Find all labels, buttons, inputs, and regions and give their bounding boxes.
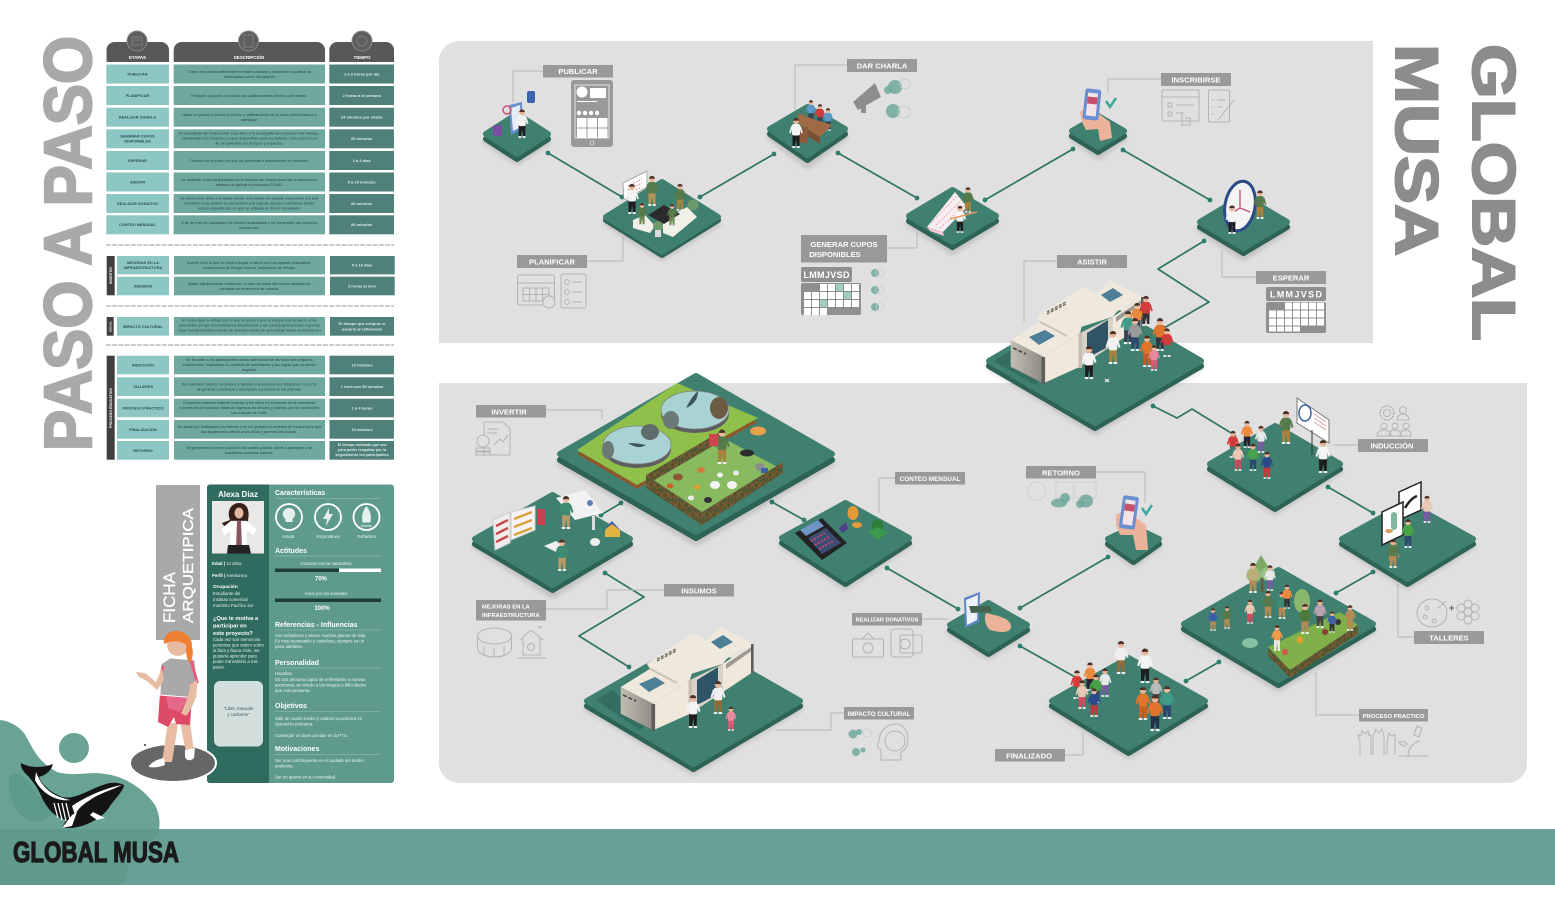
row: conteo mensual: inversiones. [239, 225, 260, 230]
row: impacto cultural: usuario al reflexionar [342, 326, 383, 332]
row: planificar: 2 horas a la semana [343, 93, 381, 98]
label: dar charla: DAR CHARLA [857, 62, 908, 70]
logo whale [21, 763, 124, 828]
row: asistir: ASISTIR [130, 180, 145, 184]
icon: cultural molecules and head [848, 724, 908, 760]
ficha motivation: Cada vez son menos las [213, 637, 260, 642]
logo blob [0, 720, 160, 885]
row: esperar: 1 a 3 días [353, 158, 371, 163]
label: asistir [1057, 255, 1127, 268]
scene: realizar donativos platform [950, 592, 1027, 657]
section sidebar: social [107, 317, 114, 336]
wall calendar with people [927, 187, 977, 236]
scene: proceso practico platform [1184, 555, 1373, 689]
row: realizar donativo: 80 minutos [351, 201, 373, 206]
row: retorno: inscribirán usuarios nuevos. [225, 450, 273, 455]
row: proceso practico: PROCESO PRACTICO [123, 406, 163, 410]
presentation board [1297, 398, 1329, 455]
row: talleres: de generar conciencia y recreación expresiva en los jóvenes. [197, 386, 302, 392]
ficha objetivos [275, 703, 381, 738]
row: impacto cultural: crear nuevas semillas a través de diversas formas de aprendizaje desde un impacto en [178, 328, 321, 332]
icon: return and teal clouds [1028, 482, 1096, 508]
row: planificar: Realizar una junta con todos los colaboradores internos del museo. [191, 93, 307, 98]
label: insumos [664, 584, 734, 596]
table header: tiempo [329, 31, 394, 62]
label: planificar [517, 255, 587, 268]
row: realizar charla: REALIZAR CHARLA [119, 114, 156, 120]
row: mejoras: 5 a 10 días [352, 262, 373, 268]
ficha personalidad [275, 660, 381, 693]
guides and children [1228, 411, 1330, 479]
label: retorno: RETORNO [1042, 468, 1080, 478]
connector: planificar to dar charla [698, 152, 776, 199]
row: finalizacion: 10 minutos [351, 427, 373, 432]
row: realizar donativo: momento a los padres se les invitará a la caja de aportes voluntarios donde [184, 200, 314, 206]
row: retorno [117, 441, 394, 460]
ficha quote box: y conforme" [227, 712, 250, 717]
ficha quote box: "Libre, tranquilo [224, 706, 254, 711]
label: retorno [1026, 466, 1096, 478]
row: talleres: Se realizarán talleres de pintura y también presentaciones didácticas con el fin [182, 382, 317, 386]
row: asistir: Se recibirán a los participantes en la entrada del museo para dar la bienvenida, [181, 177, 318, 182]
label: realizar donativos [852, 613, 922, 626]
children painting [1387, 496, 1432, 568]
ficha referencias: paso adelante. [275, 644, 303, 649]
scene: publicar platform [486, 91, 548, 162]
label: insumos: INSUMOS [681, 586, 717, 596]
row: asistir: 5 a 10 minutos [348, 180, 376, 184]
children gardening [1208, 563, 1355, 651]
table header: descripcion: DESCRIPCIÓN [234, 55, 264, 60]
label: mejoras en la infraestructura [476, 600, 546, 620]
panel: ficha arquetipica [156, 484, 394, 783]
ficha referencias: Referencias - Influencias [275, 622, 358, 629]
ficha personalidad: Hazañas [275, 671, 292, 676]
icon: investment report [476, 422, 510, 455]
row: proceso practico [117, 399, 394, 417]
row: realizar donativo [106, 194, 394, 213]
ficha caracteristicas [275, 490, 381, 539]
ficha caracteristicas: Características [275, 490, 325, 497]
ficha motivaciones [275, 746, 381, 780]
ficha referencias: Es muy reponsable y cautelosa, siempre va un [275, 638, 365, 644]
ficha title strip: ARQUETIPICA [180, 508, 197, 623]
icon: megaphone and teal thought bubbles [853, 79, 910, 118]
grass field with pools [577, 383, 758, 489]
row: proceso practico: a través de la botánica, tratando ingresos de árboles y plantas que se carbonizan [179, 405, 319, 410]
row: impacto cultural [117, 317, 394, 336]
ficha quote box [214, 681, 263, 746]
ficha personal data: Estudiante del [213, 591, 240, 596]
row: generar cupos [106, 129, 394, 148]
icon: pool and animal house [478, 626, 546, 658]
scene: retorno platform [1108, 495, 1159, 565]
ficha card background [207, 484, 394, 783]
row: publicar [106, 64, 394, 84]
ficha caracteristicas: Espontánea [317, 534, 340, 539]
label: asistir: ASISTIR [1077, 258, 1107, 266]
museum building [621, 627, 754, 731]
garden bed with fence [1268, 612, 1358, 678]
row: finalizacion: Se darán por finalizados los talleres y se les guiará a la entrada de museo para que [177, 424, 321, 429]
ficha personal data: Ocupación [213, 584, 238, 590]
row: insumos: Mayor equipamiento médico en el área de salud del museo además de [188, 281, 311, 286]
label: generar cupos disponibles [801, 235, 887, 262]
people meeting [626, 176, 685, 227]
connector: conteo to donativos [885, 566, 960, 611]
row: finalizacion: FINALIZACIÓN [129, 427, 157, 432]
ficha actitudes: 100% [314, 606, 330, 612]
connector: dar charla to generar cupos [836, 151, 919, 200]
row: generar cupos: El encargado del museo Don José Brito y la encargada del proyecto Fae Hidalgo, [179, 130, 320, 136]
label: conteo mensual: CONTEO MENSUAL [900, 476, 960, 483]
hand holding phone [1080, 88, 1116, 141]
row: retorno: para poder respaldar por la [338, 448, 387, 452]
section sidebar: proceso educativo [107, 356, 115, 460]
heading: paso a paso: PASO A PASO [31, 36, 106, 451]
panel: lower process background [439, 383, 1527, 783]
label: publicar: PUBLICAR [558, 67, 598, 76]
row: mejoras: MEJORAS EN LA [127, 260, 159, 265]
row: induccion: introducción, explicando la variedad de actividades y las reglas que se deben [183, 362, 316, 367]
painting easels [1382, 482, 1421, 560]
ficha actitudes [275, 548, 381, 612]
heading: global: GLOBAL [1460, 44, 1527, 341]
visitors crowd [1082, 296, 1173, 382]
row: mejoras: Invertir todo lo que se espera lograr a futuro con los aportes voluntarios: [187, 260, 311, 265]
ficha motivation: personas que saben sobre [213, 642, 264, 648]
ficha personal data: Edad | 14 años [212, 561, 241, 566]
ficha title strip [156, 485, 200, 640]
section sidebar: invertir: INVERTIR [109, 267, 113, 284]
row: retorno: seguridad de los participantes [335, 453, 389, 457]
animal enclosure with fence [646, 426, 783, 525]
ficha objetivos: Salir de cuarto medio y realizar su práctica en [275, 716, 363, 721]
section sidebar: invertir [107, 256, 115, 295]
row: insumos: contratar un enfermero de cabeza. [219, 286, 279, 291]
scene: inscribirse platform [1072, 88, 1124, 157]
row: induccion: Se llevarán a los participantes a una sala donde se les hará una pequeña [186, 357, 314, 362]
ficha motivation: ¿Que te motiva a [213, 616, 259, 622]
ficha actitudes: 70% [315, 576, 328, 582]
ficha objetivos: operación portuaria. [275, 722, 313, 726]
icon: palette plus flower: + [1449, 603, 1454, 613]
ficha personalidad: Personalidad [275, 660, 319, 667]
icon: registration form and checklist [1162, 90, 1234, 125]
row: asistir: además de aplicar el protocolo COVID. [216, 182, 283, 187]
scene: impacto cultural platform [587, 627, 800, 772]
calculator [795, 518, 847, 560]
row: induccion: INDUCCIÓN [132, 362, 154, 368]
label: proceso practico: PROCESO PRACTICO [1363, 714, 1425, 720]
connector: proceso practico to finalizado [1184, 660, 1221, 683]
scene: asistir platform [989, 280, 1201, 432]
ficha motivaciones: Ser una contribuyente en el cuidado del medio [275, 758, 364, 763]
section sidebar: proceso educativo: PROCESO EDUCATIVO [109, 388, 113, 428]
row: talleres: TALLERES [133, 384, 154, 389]
ficha referencias: Son soñadores y tienen muchos planes de vida. [275, 633, 366, 638]
row: realizar charla: Hacer un puerta a puerta en liceos y notificaciones de la zona para invitarlos a [182, 112, 318, 117]
icon: esperar calendar [1266, 287, 1326, 333]
label: inscribirse: INSCRIBIRSE [1172, 76, 1220, 84]
panel: upper process background [439, 41, 1373, 343]
ficha caracteristicas: Soñadora [357, 534, 376, 539]
label: generar cupos disponibles: GENERAR CUPOS [810, 240, 878, 249]
ficha personal data: Instituto comercial [213, 597, 248, 602]
icon: palette plus flower [1417, 599, 1479, 627]
connector: asistir to induccion [1151, 404, 1236, 436]
row: mejoras: INFRAESTRUCTURA [124, 265, 163, 270]
row: retorno: RETORNO [133, 448, 153, 453]
label: conteo mensual [895, 472, 965, 484]
row: planificar [106, 86, 394, 105]
row: proceso practico: 2 a 4 horas [352, 406, 373, 410]
scene: induccion platform [1210, 398, 1340, 512]
row: esperar: ESPERAR [128, 158, 147, 163]
icon: tablet with social profile [571, 80, 613, 147]
connector: induccion to talleres [1326, 485, 1375, 515]
ficha motivation: participar en [213, 624, 247, 630]
ficha personal data: Perfil | Aventurera [212, 573, 248, 578]
label: dar charla [847, 59, 917, 72]
row: proceso practico: con noticias de Chile. [231, 410, 268, 415]
ficha motivaciones: Motivaciones [275, 746, 319, 753]
row: generar cupos: GENERAR CUPOS [120, 134, 155, 138]
label: finalizado: FINALIZADO [1006, 752, 1052, 760]
row: proceso practico: El proceso práctico trata de insertar a los niños en el mundo de la naturaleza [183, 400, 316, 405]
ficha actitudes: Contacto con la naturaleza [300, 561, 352, 566]
row: generar cupos: DISPONIBLES [124, 138, 151, 144]
row: insumos: 3 horas al mes [348, 284, 377, 288]
museum guides and child [686, 681, 736, 731]
label: inscribirse [1161, 73, 1231, 86]
meeting table and sofas [633, 200, 698, 237]
table header: etapas: ETAPAS [129, 55, 146, 60]
row: retorno: El tiempo estimado que sea [338, 443, 387, 447]
big clock with people [1221, 179, 1266, 234]
label: mejoras en la infraestructura: INFRAESTRUCTURA [482, 613, 540, 619]
label: finalizado [995, 749, 1065, 762]
label: publicar [543, 65, 613, 78]
section sidebar: social: SOCIAL [108, 321, 112, 332]
connector: finalizado to donativos [1018, 644, 1075, 677]
label: proceso practico [1359, 709, 1428, 722]
ficha name: Alexa Diaz [218, 490, 258, 499]
row: realizar charla [106, 108, 394, 127]
label: impacto cultural: IMPACTO CULTURAL [848, 711, 911, 718]
connector: donativos to retorno [1018, 555, 1110, 610]
connector: publicar to planificar [546, 151, 624, 199]
connector: invertir to conteo [770, 500, 806, 522]
row: esperar: Cuenta con un plazo en que las personas e instituciones se inscriben. [189, 158, 310, 163]
scene: dar charla platform [770, 100, 845, 166]
icon: planning calendar and checklist [518, 274, 586, 308]
connector: esperar to asistir [1158, 239, 1209, 330]
ficha caracteristicas: Astuta [282, 534, 295, 539]
ficha motivaciones: Ser un aporte en su comunidad. [275, 774, 336, 780]
row: publicar: 1 a 2 horas por día [344, 72, 380, 76]
tree and bushes [1242, 555, 1310, 648]
row: generar cupos: fin de optimizar los tiempos y espacios. [215, 140, 283, 146]
ficha motivaciones: ambiente. [275, 764, 294, 768]
row: publicar: información sobre los talleres [224, 74, 275, 79]
icon: money and phone payment [852, 629, 922, 657]
row: finalizacion: los apoderados retiren a los niños y jóvenes del museo. [201, 429, 297, 434]
row: realizar donativo: Se lleva a los niños a la salida donde sus padres los estarán esperando. En ese [180, 196, 318, 200]
scene: planificar platform [606, 171, 718, 258]
heading: musa: MUSA [1383, 44, 1450, 256]
scene: conteo mensual platform [782, 503, 909, 587]
icon: raised hands and microscope plant [1358, 726, 1428, 756]
table header: etapas [106, 31, 169, 62]
row: induccion [117, 356, 394, 374]
ficha personalidad: aventuras, sin miedo a los riesgos o dificultades [275, 682, 366, 688]
hand holding phone [1116, 495, 1152, 550]
ficha personal data: marítimo Pacífico sur [213, 603, 254, 608]
scene: esperar platform [1200, 179, 1287, 258]
logo wordmark: GLOBAL MUSA [13, 837, 179, 869]
row: realizar charla: 24 minutos por charla [341, 114, 383, 120]
scene: finalizado platform [1052, 641, 1205, 756]
label: mejoras en la infraestructura: MEJORAS EN LA [482, 604, 530, 610]
row: talleres [117, 377, 394, 396]
row: publicar: Crear una cuenta adherente en redes sociales y comenzar a publicar la [188, 69, 312, 74]
table header: descripcion [174, 31, 325, 62]
ficha motivation: la flora y fauna chile, me [213, 648, 260, 653]
label: planificar: PLANIFICAR [529, 258, 576, 266]
leader lines [513, 65, 1414, 755]
row: planificar: PLANIFICAR [126, 93, 149, 98]
ficha motivation: este proyecto? [213, 631, 253, 637]
connector: talleres to proceso practico [1334, 570, 1375, 595]
row: realizar charla: participar. [241, 117, 258, 122]
ficha personalidad: Es una persona capaz de enfrentarse a nuevas [275, 677, 365, 682]
label: esperar: ESPERAR [1273, 274, 1310, 282]
scene: invertir platform [560, 376, 832, 543]
phone and social icons [493, 91, 535, 138]
icon: generar calendar [801, 267, 884, 315]
phone and hand with money [964, 592, 1011, 632]
row: asistir [106, 172, 394, 192]
row: impacto cultural: comunidad, ya que la beneficiamos directamente a las nuevas generaciones, logrando [179, 324, 320, 328]
label: generar cupos disponibles: DISPONIBLES [809, 250, 861, 259]
row: realizar donativo: REALIZAR DONATIVO [117, 201, 158, 206]
ficha motivation: pares. [213, 664, 225, 670]
label: esperar [1256, 271, 1326, 284]
ficha referencias [275, 622, 381, 649]
row: induccion: respetar. [242, 367, 257, 372]
label: invertir [476, 405, 546, 418]
row: mejoras: construcción de refugio marino, ampliación de refugio. [203, 265, 296, 270]
ficha motivation: poder transmitirlo a mis [213, 659, 258, 664]
row: generar cupos: coordinarán los horarios y cupos disponibles para los talleres, todo esto con el [182, 136, 317, 140]
connector: mejoras to impacto [579, 571, 644, 669]
row: conteo mensual: 80 minutos [351, 222, 373, 227]
label: invertir: INVERTIR [491, 408, 527, 416]
row: finalizacion [117, 420, 394, 439]
row: conteo mensual: A fin de mes se calcularán los fondos recaudados y se plantearán las próximas [181, 220, 317, 225]
label: talleres [1414, 631, 1484, 644]
coins and banknotes [839, 506, 888, 540]
row: mejoras [117, 256, 395, 274]
connector: inscribirse to esperar [1121, 148, 1212, 202]
table header: tiempo: TIEMPO [354, 55, 371, 60]
row: conteo mensual [106, 215, 394, 234]
footer band [0, 829, 1555, 885]
icon: induction gear and group [1377, 406, 1411, 436]
icon: esperar calendar: L M M J V S D [1270, 290, 1322, 300]
row: talleres: 1 hora con 30 minutos [341, 384, 384, 389]
ficha portrait [212, 501, 264, 554]
ficha objetivos: Objetivos [275, 703, 307, 710]
label: impacto cultural [844, 707, 914, 720]
ficha motivation [213, 616, 264, 670]
row: retorno: Se generarán nuevos cupos en los cuales podrán volver a participar o se [186, 445, 312, 450]
row: generar cupos: 80 minutos [351, 136, 373, 141]
whiteboard [623, 171, 647, 200]
veterinary table and staff [544, 490, 621, 571]
illustration: girl with backpack [130, 631, 216, 782]
row: insumos: INSUMOS [134, 284, 152, 288]
row: esperar [106, 151, 394, 170]
panel audience and desk [790, 100, 832, 148]
connector: invertir to mejoras [599, 501, 623, 517]
row: realizar donativo: estará especificado en qué se utilizará el dinero recaudado. [198, 206, 301, 210]
icon: generar calendar: L M M J V S D [804, 270, 850, 280]
ficha personalidad: que esto presenta. [275, 688, 311, 693]
label: induccion: INDUCCIÓN [1370, 442, 1414, 450]
ficha actitudes: Amor por los animales [305, 591, 347, 596]
row: insumos [117, 277, 395, 295]
row: impacto cultural: El tiempo que estipule el [339, 321, 385, 326]
scene: generar cupos platform [909, 187, 996, 252]
row: publicar: PUBLICAR [127, 72, 148, 76]
hosts and children [1071, 641, 1174, 731]
ficha objetivos: Conseguir un buen puntaje en la PTU. [275, 733, 348, 738]
scene: talleres platform [1342, 482, 1473, 587]
ficha personal data [212, 561, 254, 608]
label: realizar donativos: REALIZAR DONATIVOS [856, 618, 919, 624]
row: impacto cultural: IMPACTO CULTURAL [123, 324, 163, 329]
ficha title strip: FICHA [160, 571, 179, 623]
label: induccion [1358, 439, 1428, 452]
ficha motivation: gustaría aprender para [213, 654, 257, 658]
museum building [1011, 280, 1144, 384]
connector: generar cupos to inscribirse [983, 147, 1075, 202]
row: conteo mensual: CONTEO MENSUAL [119, 222, 157, 227]
table: step by step [106, 31, 395, 460]
supply shelves [493, 506, 545, 550]
row: impacto cultural: En esta etapa se refleja todo lo que se puede lograr al integrar este proyecto en la [182, 318, 317, 322]
scene: mejoras insumos platform [475, 490, 630, 596]
ficha actitudes: Actitudes [275, 548, 307, 555]
label: talleres: TALLERES [1429, 634, 1469, 642]
row: induccion: 15 minutos [351, 362, 373, 368]
